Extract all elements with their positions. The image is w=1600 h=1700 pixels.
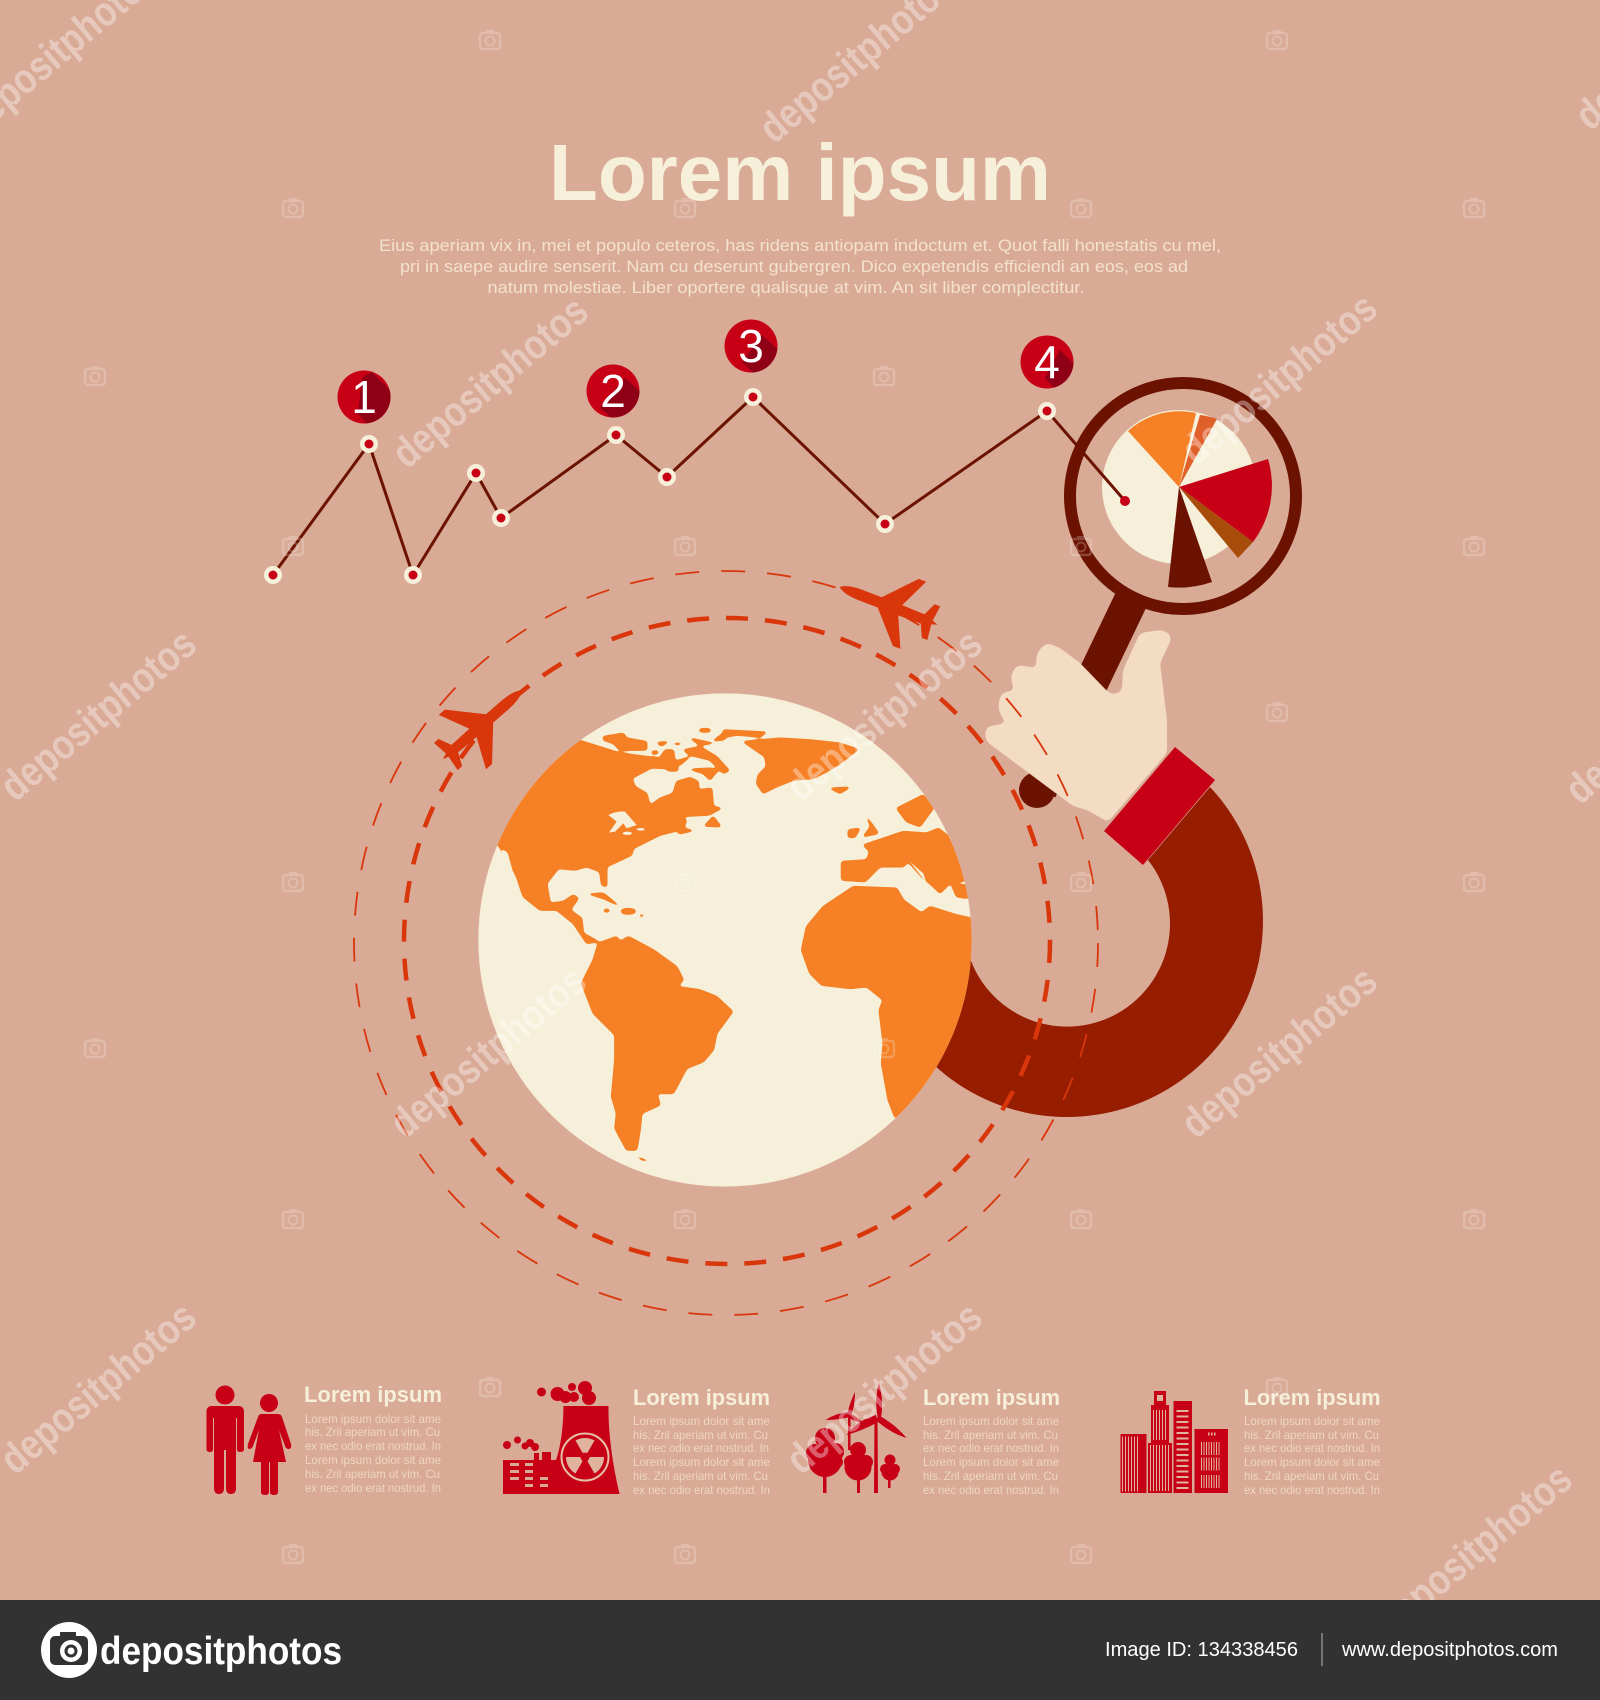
image id: Image ID: 134338456 [1105, 1639, 1298, 1661]
intro paragraph [379, 237, 1221, 297]
trees [815, 1428, 835, 1448]
outer dashed orbit [354, 571, 1098, 1315]
intro paragraph: pri in saepe audire senserit. Nam cu deserunt gubergren. Dico expetendis efficiendi an eos, eos ad [400, 258, 1188, 276]
handle [1019, 600, 1131, 808]
number badge 4: 4 [1034, 336, 1060, 388]
text block: people: his. Zril aperiam ut vim. Cu [305, 1425, 440, 1439]
text block: wind and trees: Lorem ipsum [923, 1385, 1060, 1410]
number badge 3 [724, 320, 778, 372]
text block: wind and trees: ex nec odio erat nostrud. In [923, 1441, 1059, 1455]
intro paragraph: Eius aperiam vix in, mei et populo ceteros, has ridens antiopam indoctum et. Quot falli honestatis cu mel, [379, 237, 1221, 255]
text block: city: Lorem ipsum [1244, 1385, 1380, 1410]
footer logo text: depositphotos [100, 1630, 342, 1673]
website: www.depositphotos.com [1341, 1639, 1558, 1661]
airplane upper right [827, 553, 950, 658]
line chart [264, 388, 1130, 584]
text block: nuclear plant: ex nec odio erat nostrud. In [633, 1483, 770, 1497]
data points [264, 388, 1056, 584]
watermarks: depositphotos [383, 286, 597, 477]
text block: wind and trees [923, 1385, 1060, 1497]
intro paragraph: natum molestiae. Liber oportere qualisque at vim. An sit liber complectitur. [488, 279, 1084, 297]
magnifying glass [1019, 383, 1296, 808]
data point centres [268, 392, 1130, 580]
number badge 1 [338, 370, 390, 424]
text block: wind and trees: his. Zril aperiam ut vim. Cu [923, 1428, 1058, 1442]
text block: city: ex nec odio erat nostrud. In [1244, 1483, 1380, 1497]
text block: nuclear plant [633, 1385, 770, 1497]
text block: nuclear plant: Lorem ipsum [633, 1385, 770, 1410]
text block: city: Lorem ipsum dolor sit ame [1244, 1414, 1380, 1428]
watermarks: depositphotos [777, 619, 991, 810]
text block: wind and trees: ex nec odio erat nostrud. In [923, 1483, 1059, 1497]
number badge 2 [586, 364, 640, 418]
text block: city: ex nec odio erat nostrud. In [1244, 1441, 1380, 1455]
text block: people: his. Zril aperiam ut vim. Cu [305, 1467, 440, 1481]
text block: city [1244, 1385, 1380, 1497]
text block: city: Lorem ipsum dolor sit ame [1244, 1455, 1380, 1469]
globe [460, 693, 993, 1187]
icon: wind turbines and trees [806, 1383, 906, 1493]
text block: people: Lorem ipsum [304, 1382, 442, 1407]
footer bar [0, 1600, 1600, 1700]
hand [985, 630, 1171, 822]
watermark camera marks [85, 30, 1484, 1563]
icon: nuclear plant [503, 1381, 620, 1494]
text block: nuclear plant: his. Zril aperiam ut vim. Cu [633, 1428, 768, 1442]
text block: nuclear plant: Lorem ipsum dolor sit ame [633, 1455, 770, 1469]
text block: city: his. Zril aperiam ut vim. Cu [1244, 1428, 1379, 1442]
text block: wind and trees: Lorem ipsum dolor sit ame [923, 1414, 1059, 1428]
text block: people: ex nec odio erat nostrud. In [305, 1439, 441, 1453]
title: Lorem ipsum [549, 128, 1051, 217]
lakes and inland seas [502, 811, 927, 883]
watermarks: depositphotos [1172, 956, 1386, 1147]
text block: nuclear plant: his. Zril aperiam ut vim. Cu [633, 1469, 768, 1483]
text block: nuclear plant: Lorem ipsum dolor sit ame [633, 1414, 770, 1428]
footer divider [1321, 1633, 1323, 1666]
number badge 3: 3 [738, 320, 764, 372]
icon: people [206, 1386, 291, 1495]
arm [871, 787, 1263, 1117]
pie chart [1102, 410, 1272, 588]
watermarks: depositphotos [1172, 283, 1386, 474]
footer logo icon [41, 1622, 97, 1678]
text block: people: Lorem ipsum dolor sit ame [305, 1453, 441, 1467]
continents [497, 728, 972, 1162]
smoke [503, 1381, 596, 1451]
text block: people [304, 1382, 442, 1495]
number badge 1: 1 [351, 371, 377, 423]
lens ring [1070, 383, 1296, 609]
airplane upper left [419, 663, 546, 786]
text block: nuclear plant: ex nec odio erat nostrud. In [633, 1441, 769, 1455]
watermarks: depositphotos [381, 956, 595, 1147]
radiation symbol [562, 1434, 608, 1480]
text block: people: ex nec odio erat nostrud. In [305, 1481, 441, 1495]
text block: wind and trees: Lorem ipsum dolor sit ame [923, 1455, 1059, 1469]
number badge 4 [1020, 336, 1074, 388]
text block: wind and trees: his. Zril aperiam ut vim. Cu [923, 1469, 1058, 1483]
number badge 2: 2 [600, 365, 626, 417]
factory windows [510, 1463, 548, 1487]
watermarks: depositphotos [777, 1292, 991, 1483]
icon: city buildings [1120, 1391, 1228, 1493]
text block: city: his. Zril aperiam ut vim. Cu [1244, 1469, 1379, 1483]
inner dashed orbit [404, 618, 1050, 1264]
shirt cuff [1104, 747, 1215, 865]
text block: people: Lorem ipsum dolor sit ame [305, 1412, 441, 1426]
